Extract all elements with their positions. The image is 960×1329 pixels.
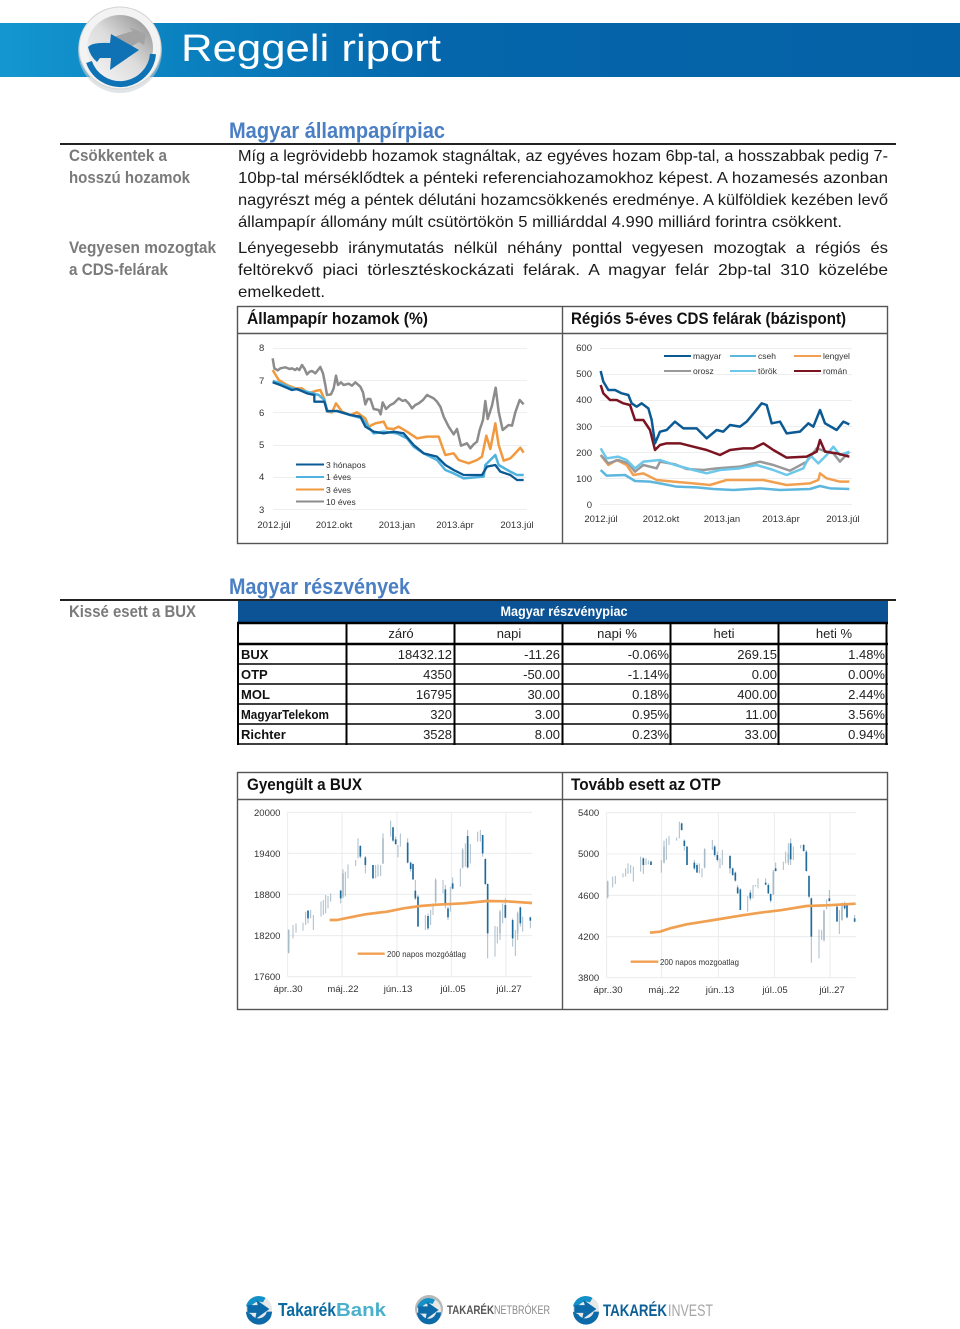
line chart: Állampapír hozamok: 2012.okt xyxy=(316,520,353,531)
line chart: Állampapír hozamok: 2012.júl xyxy=(257,520,291,531)
legend: 10 éves xyxy=(326,497,356,507)
logo: Takarék Invest: TAKARÉK xyxy=(603,1301,668,1320)
footer logos xyxy=(246,1295,713,1325)
side label: Vegyesen mozogtak a CDS-felárak: a CDS-felárak xyxy=(69,261,169,279)
legend: 200 napos mozgóátlag xyxy=(387,949,466,959)
logo: TakarékBank xyxy=(246,1296,387,1325)
table: Magyar részvénypiac: 3528 xyxy=(423,727,452,742)
logo: Takarék Netbróker: TAKARÉK xyxy=(447,1302,494,1317)
logo: Takarék Invest: INVEST xyxy=(668,1301,713,1320)
text block: hozamok: Míg a legrövidebb hozamok stagnáltak, az egyéves hozam 6bp-tal, a hosszabbak pedig 7- xyxy=(238,148,888,165)
line chart: Régiós CDS felárak: 100 xyxy=(576,474,592,485)
legend: 3 éves xyxy=(326,485,351,495)
table: Magyar részvénypiac: 2.44% xyxy=(848,687,885,702)
table: Magyar részvénypiac: 16795 xyxy=(416,687,452,702)
candlestick chart: BUX xyxy=(254,808,532,995)
candlestick chart: OTP: ápr..30 xyxy=(593,985,623,996)
table: Magyar részvénypiac: 400.00 xyxy=(737,687,777,702)
table: Magyar részvénypiac: 18432.12 xyxy=(398,647,452,662)
table header: Magyar részvénypiac xyxy=(500,603,628,619)
table: Magyar részvénypiac: 269.15 xyxy=(737,647,777,662)
line chart: Régiós CDS felárak: 0 xyxy=(587,500,592,511)
table: Magyar részvénypiac: OTP xyxy=(241,667,268,682)
candlestick chart: OTP: júl..27 xyxy=(818,985,845,996)
table header xyxy=(238,601,888,622)
candlestick chart: BUX: máj..22 xyxy=(327,984,359,995)
side label: Kissé esett a BUX: Kissé esett a BUX xyxy=(69,603,196,621)
candlestick chart: OTP: jún..13 xyxy=(705,985,734,996)
line chart: Állampapír hozamok: 3 xyxy=(259,505,264,516)
table: Magyar részvénypiac xyxy=(237,601,888,745)
table: Magyar részvénypiac: -1.14% xyxy=(628,667,669,682)
table: Magyar részvénypiac: 1.48% xyxy=(848,647,885,662)
legend: orosz xyxy=(693,366,714,376)
candlestick chart: OTP xyxy=(578,808,856,996)
text block: CDS-felárak: emelkedett. xyxy=(238,284,325,301)
side label: Csökkentek a hosszú hozamok: Csökkentek a xyxy=(69,147,168,165)
candlestick chart: BUX: 18800 xyxy=(254,890,280,901)
legend: 3 hónapos xyxy=(326,460,366,470)
table: Magyar részvénypiac: 33.00 xyxy=(744,727,777,742)
logo: Takarék Invest xyxy=(573,1296,713,1325)
side label: Csökkentek a hosszú hozamok xyxy=(69,147,191,187)
table: Magyar részvénypiac: 0.95% xyxy=(632,707,669,722)
table: Magyar részvénypiac: 0.00% xyxy=(848,667,885,682)
candlestick chart: BUX: júl..27 xyxy=(495,984,522,995)
table: Magyar részvénypiac: 0.00 xyxy=(752,667,777,682)
legend: román xyxy=(823,366,847,376)
candlestick chart: BUX: 20000 xyxy=(254,808,280,819)
legend xyxy=(664,351,850,376)
line chart: Régiós CDS felárak: 2013.jan xyxy=(704,514,740,525)
table: Magyar részvénypiac: 3.00 xyxy=(535,707,560,722)
table: Magyar részvénypiac: BUX xyxy=(241,647,269,662)
text block: hozamok: állampapír állomány múlt csütörtökön 5 milliárddal 4.990 milliárd forintra csökkent. xyxy=(238,214,842,231)
candlestick chart: OTP: 4200 xyxy=(578,932,599,943)
line chart: Régiós CDS felárak: 2012.okt xyxy=(643,514,680,525)
candlestick chart: BUX: júl..05 xyxy=(439,984,466,995)
legend: magyar xyxy=(693,351,722,361)
line chart: Régiós CDS felárak: 2012.júl xyxy=(584,514,618,525)
line chart: Állampapír hozamok: 2013.ápr xyxy=(436,520,474,531)
legend: lengyel xyxy=(823,351,850,361)
candlestick chart: BUX: 18200 xyxy=(254,931,280,942)
text block: CDS-felárak: Lényegesebb iránymutatás nélkül néhány ponttal vegyesen mozogtak a régiós és xyxy=(238,240,888,257)
legend xyxy=(296,460,366,507)
logo: TakarékBank: Bank xyxy=(336,1300,387,1320)
logo: Takarék Netbróker xyxy=(415,1295,550,1324)
line chart: Állampapír hozamok: 4 xyxy=(259,472,264,483)
table: Magyar részvénypiac: 11.00 xyxy=(745,707,777,722)
text block: hozamok: nagyrészt még a péntek délutáni hozamcsökkenés eredménye. A külföldiek kezében levő xyxy=(238,192,888,209)
candlestick chart: OTP: 5000 xyxy=(578,849,599,860)
table: Magyar részvénypiac: napi xyxy=(497,626,521,641)
line chart: Régiós CDS felárak: 500 xyxy=(576,369,592,380)
table: Magyar részvénypiac: heti xyxy=(714,626,735,641)
chart title: Gyengült a BUX: Gyengült a BUX xyxy=(247,775,363,794)
candlestick chart: BUX: jún..13 xyxy=(383,984,412,995)
table: Magyar részvénypiac: -0.06% xyxy=(628,647,669,662)
line chart: Állampapír hozamok: 8 xyxy=(259,343,264,354)
line chart: Régiós CDS felárak: 600 xyxy=(576,343,592,354)
line chart: Állampapír hozamok: 5 xyxy=(259,440,264,451)
text block: CDS-felárak xyxy=(238,240,888,301)
side label: Csökkentek a hosszú hozamok: hosszú hozamok xyxy=(69,169,191,187)
table: Magyar részvénypiac: 0.94% xyxy=(848,727,885,742)
table: Magyar részvénypiac: 0.18% xyxy=(632,687,669,702)
logo: Takarék Netbróker: NETBRÓKER xyxy=(494,1302,550,1317)
candlestick chart: OTP: 4600 xyxy=(578,891,599,902)
line chart: Régiós CDS felárak: 400 xyxy=(576,395,592,406)
line chart: Régiós CDS felárak: 300 xyxy=(576,422,592,433)
legend: török xyxy=(758,366,778,376)
table: Magyar részvénypiac: napi % xyxy=(597,626,637,641)
line chart: Régiós CDS felárak: 200 xyxy=(576,448,592,459)
chart title: Tovább esett az OTP: Tovább esett az OTP xyxy=(571,775,721,794)
text block: hozamok xyxy=(238,148,888,231)
table: Magyar részvénypiac: 320 xyxy=(430,707,452,722)
line chart: Állampapír hozamok: 6 xyxy=(259,408,264,419)
candlestick chart: BUX: ápr..30 xyxy=(273,984,303,995)
candlestick chart: BUX: 17600 xyxy=(254,972,280,983)
line chart: Állampapír hozamok: 7 xyxy=(259,376,264,387)
panel: bottom charts frame xyxy=(237,772,888,1010)
table: Magyar részvénypiac: Richter xyxy=(241,727,286,742)
candlestick chart: OTP: 3800 xyxy=(578,973,599,984)
line chart: Régiós CDS felárak xyxy=(576,343,860,525)
table: Magyar részvénypiac: MagyarTelekom xyxy=(241,707,329,722)
table: Magyar részvénypiac: -11.26 xyxy=(524,647,560,662)
line chart: Állampapír hozamok xyxy=(257,343,534,531)
text block: CDS-felárak: feltörekvő piaci törlesztéskockázati felárak. A magyar felár 2bp-tal 310 közelébe xyxy=(238,262,888,279)
line chart: Állampapír hozamok: 2013.júl xyxy=(500,520,534,531)
candlestick chart: OTP: máj..22 xyxy=(648,985,680,996)
table: Magyar részvénypiac: -50.00 xyxy=(523,667,560,682)
line chart: Régiós CDS felárak: 2013.júl xyxy=(826,514,860,525)
icon: round arrow logo xyxy=(78,7,162,93)
side label: Vegyesen mozogtak a CDS-felárak xyxy=(69,239,217,279)
panel: top charts frame xyxy=(237,306,888,544)
heading: Magyar részvények: Magyar részvények xyxy=(229,574,411,599)
table: Magyar részvénypiac: 3.56% xyxy=(848,707,885,722)
legend: cseh xyxy=(758,351,776,361)
chart title: Állampapír hozamok: Állampapír hozamok (%) xyxy=(247,309,428,328)
heading: Magyar állampapírpiac: Magyar állampapírpiac xyxy=(229,118,445,143)
candlestick chart: OTP: júl..05 xyxy=(761,985,788,996)
line chart: Állampapír hozamok: 2013.jan xyxy=(379,520,415,531)
legend: 1 éves xyxy=(326,472,351,482)
candlestick chart: BUX: 19400 xyxy=(254,849,280,860)
candlestick chart: OTP: 5400 xyxy=(578,808,599,819)
title: Reggeli riport: Reggeli riport xyxy=(181,28,442,70)
side label: Vegyesen mozogtak a CDS-felárak: Vegyesen mozogtak xyxy=(69,239,217,257)
text block: hozamok: 10bp-tal mérséklődtek a pénteki referenciahozamokhoz képest. A hozamesés azonban xyxy=(238,170,888,187)
header banner xyxy=(0,7,960,93)
logo: TakarékBank: Takarék xyxy=(278,1300,337,1320)
table: Magyar részvénypiac: MOL xyxy=(241,687,270,702)
table: Magyar részvénypiac: záró xyxy=(388,626,414,641)
table: Magyar részvénypiac: 8.00 xyxy=(535,727,560,742)
table: Magyar részvénypiac: 4350 xyxy=(423,667,452,682)
chart title: Régiós CDS: Régiós 5-éves CDS felárak (bázispont) xyxy=(571,309,846,328)
table: Magyar részvénypiac: 30.00 xyxy=(527,687,560,702)
table: Magyar részvénypiac: heti % xyxy=(816,626,853,641)
table: Magyar részvénypiac: 0.23% xyxy=(632,727,669,742)
line chart: Régiós CDS felárak: 2013.ápr xyxy=(762,514,800,525)
legend: 200 napos mozgoatlag xyxy=(660,957,739,967)
